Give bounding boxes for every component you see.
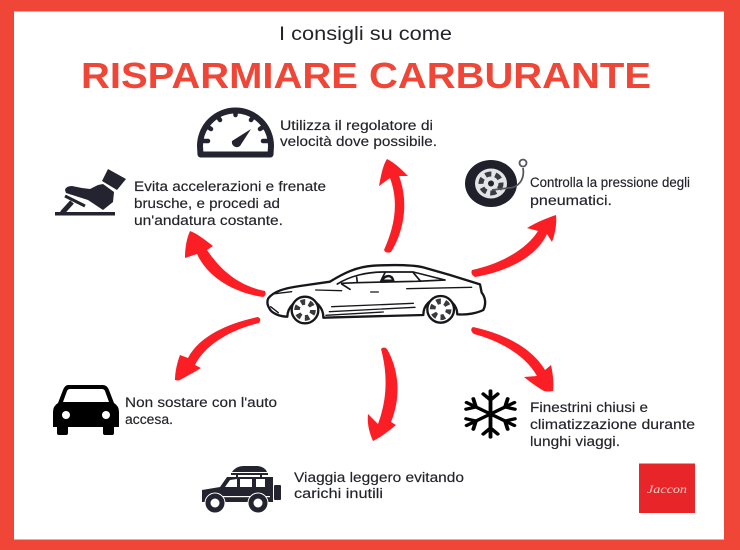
tip text: idling: Non sostare con l'auto: [125, 395, 277, 410]
tip text: acceleration: un'andatura costante.: [134, 213, 283, 228]
tip text: speed regulator: velocità dove possibile.: [280, 134, 437, 149]
tip text: travel light: carichi inutili: [294, 486, 383, 501]
tip text: idling: accesa.: [125, 412, 173, 427]
arrow: upper left to pedal tip: [185, 231, 266, 297]
tip text: acceleration: brusche, e procedi ad: [134, 196, 280, 211]
logo badge: Jaccon: [647, 482, 687, 496]
arrow: up to speed regulator: [379, 159, 408, 253]
arrow: lower right to windows tip: [471, 327, 553, 392]
icon: SUV with roof box: [202, 466, 281, 513]
logo badge: [639, 464, 695, 513]
tip text: travel light: [294, 470, 464, 501]
central car illustration: [267, 265, 485, 323]
icon: tyre with pressure gauge: [465, 160, 526, 207]
tip text: windows and air conditioning: Finestrini chiusi e: [530, 400, 648, 415]
arrow: upper right to tyre tip: [471, 215, 556, 277]
icon: foot on pedal: [55, 169, 126, 216]
tip text: windows and air conditioning: [530, 400, 695, 449]
tip text: speed regulator: [280, 118, 437, 149]
tip text: windows and air conditioning: lunghi viaggi.: [530, 434, 620, 449]
tip text: acceleration: Evita accelerazioni e frenate: [134, 179, 326, 194]
arrow: down to luggage tip: [368, 348, 398, 441]
tip text: acceleration: [134, 179, 326, 228]
tip text: tyre pressure: [530, 175, 690, 208]
arrow: lower left to idling tip: [175, 317, 260, 380]
tip text: travel light: Viaggia leggero evitando: [294, 470, 464, 485]
tip text: speed regulator: Utilizza il regolatore di: [280, 118, 433, 133]
icon: speedometer: [200, 110, 271, 154]
tip text: tyre pressure: pneumatici.: [530, 193, 612, 208]
tip text: tyre pressure: Controlla la pressione degli: [530, 175, 690, 190]
icon: car front: [53, 385, 119, 435]
subtitle: I consigli su come: [279, 23, 452, 45]
tip text: idling: [125, 395, 277, 427]
icon: snowflake: [463, 391, 518, 437]
tip text: windows and air conditioning: climatizzazione durante: [530, 417, 695, 432]
title: RISPARMIARE CARBURANTE: [81, 55, 651, 96]
